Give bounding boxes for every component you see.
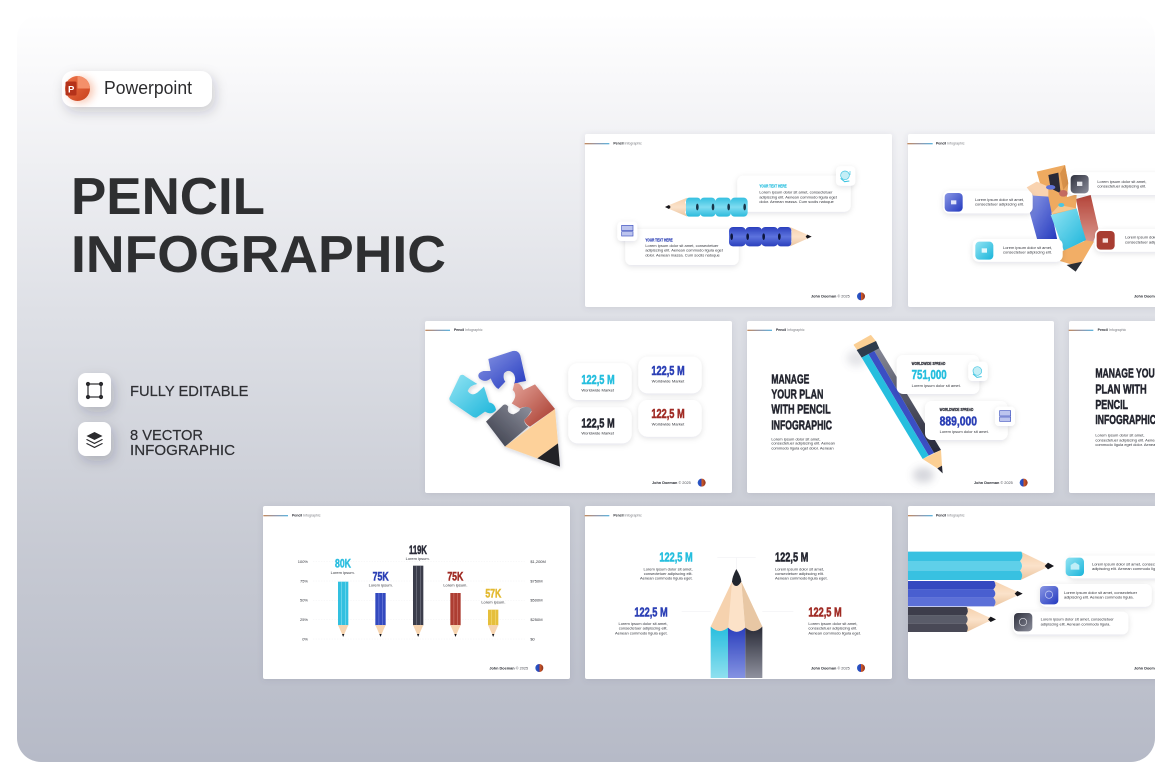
badge: Powerpoint [62,71,212,107]
heading: MANAGE [771,371,810,386]
stat card: blue: 122,5 M [651,363,685,378]
callout: top text card [737,176,851,212]
stat: red: Aenean commodo ligula eget. [808,630,861,635]
callout: blue card [1040,584,1152,607]
callout: top right card: consectetuer adipiscing elit. [1097,184,1146,189]
callout: top right card: Lorem ipsum dolor sit amet, [1097,179,1147,184]
paragraph [771,436,835,450]
heading: WITH PENCIL [771,402,831,417]
stat card: 889,000 [925,401,1015,440]
icon: layers [86,432,103,448]
pencil: large upright [711,569,762,678]
callout: bottom text card [625,229,739,265]
heading: PENCIL [1095,397,1128,412]
slide 4: diagonal pencil: Pencil Infographic [776,328,805,332]
callout: dark card: adipiscing elit. Aenean commodo ligula. [1041,621,1110,626]
callout: top text card: dolor. Aenean massa. Cum sociis natoque [759,199,835,204]
stat: dark: Lorem ipsum dolor sit amet, [775,566,824,571]
callout: bottom text card: YOUR TEXT HERE [645,237,673,242]
pencil: cyan segmented [665,198,748,217]
feature: fully editable [78,373,248,407]
stat card: 751,000 [897,355,988,394]
callout: cyan card [1066,556,1170,578]
chart axes: 75% [300,578,308,583]
slide 5: clipped heading slide: Pencil Infographic [1098,328,1126,332]
slide 1: segmented pencils: John Doeman © 2025 [811,295,850,299]
slide 6: pencil bar chart: John Doeman © 2025 [489,666,528,670]
chart axes: $1,200M [530,559,546,564]
chart axes: $250M [530,617,543,622]
illustration: puzzle pencil [449,351,560,467]
callout: cyan card: adipiscing elit. Aenean commodo ligula [1092,566,1161,571]
callout: cyan card: Lorem ipsum dolor sit amet, consectetuer [1092,561,1166,566]
stat: blue: 122,5 M [634,605,668,620]
badge label: Powerpoint [104,78,192,98]
pencil: dark [908,607,996,632]
stat card: 889,000: WORLDWIDE SPREAD [940,407,973,412]
stat card: cyan [568,363,632,400]
slide 1: segmented pencils [585,134,892,307]
callout: top right card [1068,172,1168,195]
callout: top text card: adipiscing elit. Aenean commodo ligula eget [759,194,838,199]
callout: left card [943,191,1033,213]
feature: 8 vector infographic [78,422,235,459]
stat: cyan: Lorem ipsum dolor sit amet, [643,566,693,571]
paragraph: Lorem ipsum dolor sit amet, [771,436,821,441]
callout: left card: consectetuer adipiscing elit. [975,202,1024,207]
slide 4: diagonal pencil: John Doeman © 2025 [974,481,1013,485]
bar: 80K [331,558,355,637]
bar: 119K: Lorem ipsum. [406,556,430,561]
slide 7: four stats around pencil: John Doeman © 2025 [811,666,850,670]
callout: right card [1095,229,1170,252]
pencil: diagonal [847,336,943,483]
chart axes: $750M [530,578,543,583]
paragraph: commodo ligula eget dolor. Aenean [1095,442,1158,447]
bar: 80K: Lorem ipsum. [331,570,355,575]
chart axes: $500M [530,598,543,603]
slide 8: horizontal pencils: Pencil Infographic [936,513,965,517]
heading [771,371,832,432]
callout: bottom card: Lorem ipsum dolor sit amet, [1003,245,1052,250]
stat card: red: Worldwide Market [652,422,685,427]
stat card: 751,000: 751,000 [912,367,947,382]
stat card: 751,000: WORLDWIDE SPREAD [912,361,945,366]
paragraph: Lorem ipsum dolor sit amet, [1095,433,1145,438]
bar: 75K blue [369,570,393,637]
callout: bottom text card: adipiscing elit. Aenean commodo ligula eget [645,248,724,253]
title [71,168,446,284]
slide 3: puzzle pencil [425,321,732,493]
stat card: 889,000: Lorem ipsum dolor sit amet. [940,429,989,434]
feature: fully editable: FULLY EDITABLE [130,383,248,400]
icon: vector square [86,382,103,399]
chart axes: 25% [300,617,308,622]
paragraph: commodo ligula eget dolor. Aenean [771,445,834,450]
stat: dark: Aenean commodo ligula eget. [775,576,828,581]
paragraph: consectetuer adipiscing elit. Aenean [771,441,835,446]
heading: YOUR PLAN [771,387,823,402]
icon: blue screen [617,222,637,241]
callout: bottom text card: dolor. Aenean massa. Cum sociis natoque [645,252,721,257]
stat: cyan: 122,5 M [659,549,693,564]
pencil: exploded 3D [1027,165,1098,272]
stat: red [808,605,861,635]
slide 2: exploded pencil [907,134,1170,307]
stat: red: consectetuer adipiscing elit. [808,626,857,631]
slide 4: diagonal pencil [747,321,1054,493]
pencil: cyan [908,552,1054,580]
feature: 8 vector infographic: 8 VECTOR [130,427,203,444]
title: PENCIL [71,168,265,226]
slide 6: pencil bar chart [263,506,570,679]
stat: blue: Aenean commodo ligula eget. [615,630,668,635]
paragraph: consectetuer adipiscing elit. Aenean [1095,437,1159,442]
callout: bottom card [973,239,1063,262]
icon: cyan hand globe [836,166,855,186]
slide 3: puzzle pencil: Pencil Infographic [454,328,483,332]
slide 7: four stats around pencil: Pencil Infographic [613,513,642,517]
slide 5: clipped heading slide [1068,321,1155,494]
bar: 80K: 80K [335,558,351,571]
chart axes [298,559,546,641]
chart axes: $0 [530,636,536,641]
stat: blue [615,605,668,635]
callout: dark card: Lorem ipsum dolor sit amet, consectetuer [1041,617,1114,622]
callout: bottom text card: Lorem ipsum dolor sit amet, consectetuer [645,243,719,248]
icon: PowerPoint logo [65,76,90,101]
heading: INFOGRAPHIC [771,417,832,432]
bar: 75K red [443,570,467,637]
heading [1096,368,1155,424]
callout: left card: Lorem ipsum dolor sit amet, [975,197,1024,202]
stat: red: Lorem ipsum dolor sit amet, [808,621,858,626]
bar: 75K red: 75K [447,570,464,583]
bar: 57K: 57K [485,587,502,600]
stat: cyan: Aenean commodo ligula eget. [640,576,693,581]
stat card: blue: Worldwide Market [652,379,685,384]
paragraph [1096,434,1155,447]
chart axes: 100% [298,559,308,564]
slide 7: four stats around pencil [585,506,892,679]
slide 3: puzzle pencil: John Doeman © 2025 [652,481,691,485]
callout: dark card [1013,612,1128,634]
stat card: dark: Worldwide Market [581,431,615,436]
bar: 75K blue: Lorem ipsum. [369,582,393,587]
stat: dark: 122,5 M [775,549,808,564]
feature: 8 vector infographic: INFOGRAPHIC [130,442,235,459]
chart axes: 50% [300,598,308,603]
heading: PLAN WITH [1095,381,1147,396]
stat card: dark: 122,5 M [581,415,615,430]
bar: 75K red: Lorem ipsum. [443,582,467,587]
icon: PowerPoint logo: P [68,84,75,96]
stat card: red [638,400,702,437]
slide 2: exploded pencil: Pencil Infographic [936,142,965,146]
stat: cyan [640,549,693,581]
stat card: dark [568,407,632,443]
stat card: 889,000: 889,000 [940,413,977,428]
callout: top text card: Lorem ipsum dolor sit amet, consectetuer [759,190,833,195]
slide 1: segmented pencils: Pencil Infographic [613,142,642,146]
bar: 119K: 119K [409,544,427,557]
chart axes: 0% [302,636,308,641]
pencil: blue segmented [729,227,812,246]
stat: dark: consectetuer adipiscing elit. [775,571,824,576]
stat: dark [775,549,828,581]
stat card: blue [638,357,702,393]
stat: cyan: consectetuer adipiscing elit. [644,571,693,576]
stat: blue: Lorem ipsum dolor sit amet, [618,621,668,626]
bar: 57K: Lorem ipsum. [481,600,505,605]
stat: blue: consectetuer adipiscing elit. [619,626,668,631]
bar: 57K [481,587,505,637]
callout: bottom card: consectetuer adipiscing elit. [1003,250,1052,255]
stat: red: 122,5 M [808,605,842,620]
stat card: red: 122,5 M [651,406,685,421]
pencil: blue [908,581,1023,606]
callout: blue card: Lorem ipsum dolor sit amet, consectetuer [1064,590,1138,595]
title: INFOGRAPHIC [71,226,446,284]
bar: 119K [406,544,430,637]
stat card: 751,000: Lorem ipsum dolor sit amet. [912,383,961,388]
callout: blue card: adipiscing elit. Aenean commodo ligula. [1064,595,1134,600]
stat card: cyan: Worldwide Market [581,388,615,393]
bar: 75K blue: 75K [373,570,389,583]
slide 6: pencil bar chart: Pencil Infographic [292,513,321,517]
slide 8: horizontal pencils [908,506,1170,679]
stat card: cyan: 122,5 M [581,372,615,387]
callout: top text card: YOUR TEXT HERE [759,184,787,189]
